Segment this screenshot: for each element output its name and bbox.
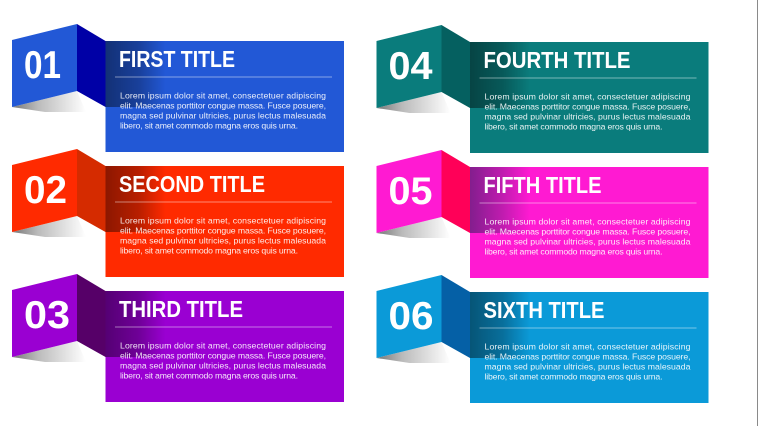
number tab 04 [376, 25, 442, 108]
text block: fifth: Lorem ipsum dolor sit amet, consectetuer adipiscing [484, 216, 691, 226]
fold face 06 [442, 275, 470, 358]
text block: sixth: libero, sit amet commodo magna eros quis urna. [484, 372, 662, 382]
heading: sixth title: SIXTH TITLE [484, 297, 604, 323]
number tab 03 [12, 274, 77, 357]
panel shading: first title [106, 41, 166, 107]
number 04: 04 [388, 45, 433, 88]
panel: fifth title [470, 167, 708, 278]
card 04: fourth title [376, 25, 708, 153]
fold shadow 02 [12, 216, 86, 237]
number 06: 06 [388, 295, 434, 338]
panel: sixth title [470, 292, 708, 403]
panel shading: sixth title [470, 292, 530, 358]
text block: second: elit. Maecenas porttitor congue massa. Fusce posuere, [120, 226, 326, 236]
card 03: third title [12, 274, 344, 402]
text block: first [120, 90, 326, 130]
card 06: sixth title [376, 275, 708, 403]
text block: fifth: elit. Maecenas porttitor congue massa. Fusce posuere, [484, 226, 690, 236]
text block: second: Lorem ipsum dolor sit amet, consectetuer adipiscing [120, 216, 326, 226]
heading: fifth title: FIFTH TITLE [484, 172, 602, 198]
text block: sixth: elit. Maecenas porttitor congue massa. Fusce posuere, [484, 352, 690, 362]
fold shadow 04 [376, 92, 450, 113]
card 05: fifth title [376, 150, 708, 278]
fold shadow 05 [376, 217, 450, 238]
fold face 05 [442, 150, 470, 233]
heading: fourth title: FOURTH TITLE [484, 47, 630, 73]
fold shadow 03 [12, 341, 86, 362]
text block: second: magna sed pulvinar ultricies, purus lectus malesuada [120, 236, 326, 246]
text block: fourth: magna sed pulvinar ultricies, purus lectus malesuada [484, 112, 691, 122]
text block: second [120, 216, 326, 256]
text block: second: libero, sit amet commodo magna eros quis urna. [120, 246, 298, 256]
number tab 06 [376, 275, 442, 358]
heading: first title: FIRST TITLE [119, 46, 235, 72]
number tab 05 [376, 150, 442, 233]
text block: first: magna sed pulvinar ultricies, purus lectus malesuada [120, 110, 326, 120]
text block: fourth: libero, sit amet commodo magna eros quis urna. [484, 122, 662, 132]
text block: sixth: Lorem ipsum dolor sit amet, consectetuer adipiscing [484, 342, 691, 352]
text block: fifth [484, 216, 691, 256]
text block: first: libero, sit amet commodo magna eros quis urna. [120, 120, 298, 130]
fold shadow 06 [376, 342, 450, 363]
number 01: 01 [24, 44, 61, 87]
card 02: second title [12, 149, 344, 277]
text block: first: Lorem ipsum dolor sit amet, consectetuer adipiscing [120, 90, 326, 100]
panel: third title [106, 291, 344, 402]
text block: third: Lorem ipsum dolor sit amet, consectetuer adipiscing [120, 340, 326, 350]
panel: second title [106, 166, 344, 277]
text block: third: magna sed pulvinar ultricies, purus lectus malesuada [120, 360, 326, 370]
card 01: first title [12, 24, 344, 152]
fold face 02 [77, 149, 106, 232]
text block: fourth: Lorem ipsum dolor sit amet, consectetuer adipiscing [484, 92, 691, 102]
panel: fourth title [470, 42, 708, 153]
text block: third: libero, sit amet commodo magna eros quis urna. [120, 370, 298, 380]
fold face 01 [77, 24, 106, 107]
fold shadow 01 [12, 91, 86, 112]
fold face 04 [442, 25, 470, 108]
panel shading: third title [106, 291, 166, 357]
heading: third title: THIRD TITLE [119, 296, 243, 322]
number 02: 02 [24, 169, 67, 212]
panel shading: fourth title [470, 42, 530, 108]
panel shading: second title [106, 166, 166, 232]
fold face 03 [77, 274, 106, 357]
text block: sixth: magna sed pulvinar ultricies, purus lectus malesuada [484, 362, 691, 372]
panel: first title [106, 41, 344, 152]
panel shading: fifth title [470, 167, 530, 233]
number 05: 05 [388, 170, 432, 213]
text block: fourth: elit. Maecenas porttitor congue massa. Fusce posuere, [484, 102, 690, 112]
text block: fourth [484, 92, 691, 132]
number tab 01 [12, 24, 77, 107]
text block: sixth [484, 342, 691, 382]
text block: third: elit. Maecenas porttitor congue massa. Fusce posuere, [120, 350, 326, 360]
number tab 02 [12, 149, 77, 232]
text block: third [120, 340, 326, 380]
text block: first: elit. Maecenas porttitor congue massa. Fusce posuere, [120, 100, 326, 110]
text block: fifth: magna sed pulvinar ultricies, purus lectus malesuada [484, 236, 691, 246]
text block: fifth: libero, sit amet commodo magna eros quis urna. [484, 246, 662, 256]
heading: second title: SECOND TITLE [119, 171, 265, 197]
number 03: 03 [24, 294, 70, 337]
